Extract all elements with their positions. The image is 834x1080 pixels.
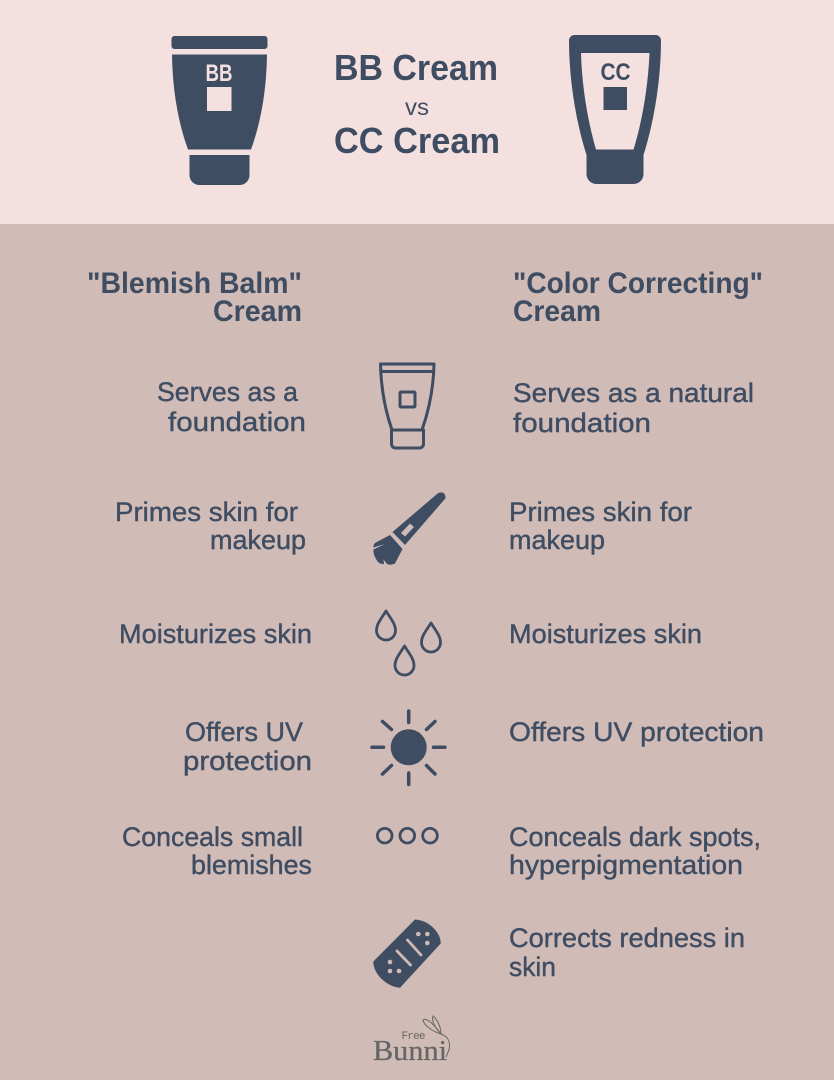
BB text: serves as a foundation: foundation <box>168 407 306 437</box>
body panel <box>0 224 834 1080</box>
right column heading: Cream <box>513 295 601 328</box>
CC text: corrects redness <box>509 923 745 982</box>
BB text: moisturizes skin: Moisturizes skin <box>119 619 312 649</box>
BB text: primes skin: makeup <box>210 525 306 555</box>
CC text: serves as a natural foundation: foundation <box>513 408 651 438</box>
BB text: serves as a foundation: Serves as a <box>157 377 299 407</box>
icon: CC cream tube: CC <box>600 59 630 86</box>
BB text: serves as a foundation <box>157 377 306 437</box>
icon: outlined tube <box>380 364 434 448</box>
CC text: corrects redness: skin <box>509 952 556 982</box>
icon: BB cream tube: BB <box>206 60 232 87</box>
title: CC Cream <box>334 120 500 161</box>
CC text: UV protection: Offers UV protection <box>509 717 764 747</box>
CC text: conceals dark spots <box>509 822 761 880</box>
CC text: primes skin: makeup <box>509 525 605 555</box>
title: BB Cream <box>334 47 498 88</box>
icon: CC cream tube <box>569 35 661 184</box>
icon: three circles <box>377 828 437 843</box>
title: vs <box>405 94 429 120</box>
icon: water drops <box>376 611 440 675</box>
icon: bandage <box>373 920 441 988</box>
icon: makeup brush <box>373 492 446 565</box>
BB text: primes skin <box>115 497 306 555</box>
BB text: UV protection: Offers UV <box>185 717 303 747</box>
left column heading: "Blemish Balm" <box>87 267 302 300</box>
logo: Free Bunni <box>373 1016 450 1067</box>
logo: Free Bunni: Free <box>402 1031 426 1043</box>
CC text: conceals dark spots: hyperpigmentation <box>509 850 743 880</box>
left column heading <box>87 267 302 328</box>
BB text: primes skin: Primes skin for <box>115 497 298 527</box>
CC text: serves as a natural foundation: Serves as a natural <box>513 378 754 408</box>
header band <box>0 0 834 224</box>
right column heading <box>513 267 763 328</box>
icon: sun <box>372 711 445 784</box>
CC text: serves as a natural foundation <box>513 378 754 438</box>
BB text: UV protection <box>183 717 312 776</box>
CC text: corrects redness: Corrects redness in <box>509 923 745 953</box>
CC text: primes skin <box>509 497 692 555</box>
icon: BB cream tube <box>172 36 268 185</box>
logo: Free Bunni: Bunni <box>373 1035 447 1067</box>
right column heading: "Color Correcting" <box>513 267 763 300</box>
BB text: conceals small blemishes: Conceals small <box>122 822 303 852</box>
left column heading: Cream <box>213 295 302 328</box>
CC text: moisturizes skin: Moisturizes skin <box>509 619 702 649</box>
BB text: UV protection: protection <box>183 746 312 776</box>
CC text: conceals dark spots: Conceals dark spots, <box>509 822 761 852</box>
title <box>334 47 500 161</box>
CC text: primes skin: Primes skin for <box>509 497 692 527</box>
BB text: conceals small blemishes <box>122 822 312 880</box>
BB text: conceals small blemishes: blemishes <box>191 850 312 880</box>
